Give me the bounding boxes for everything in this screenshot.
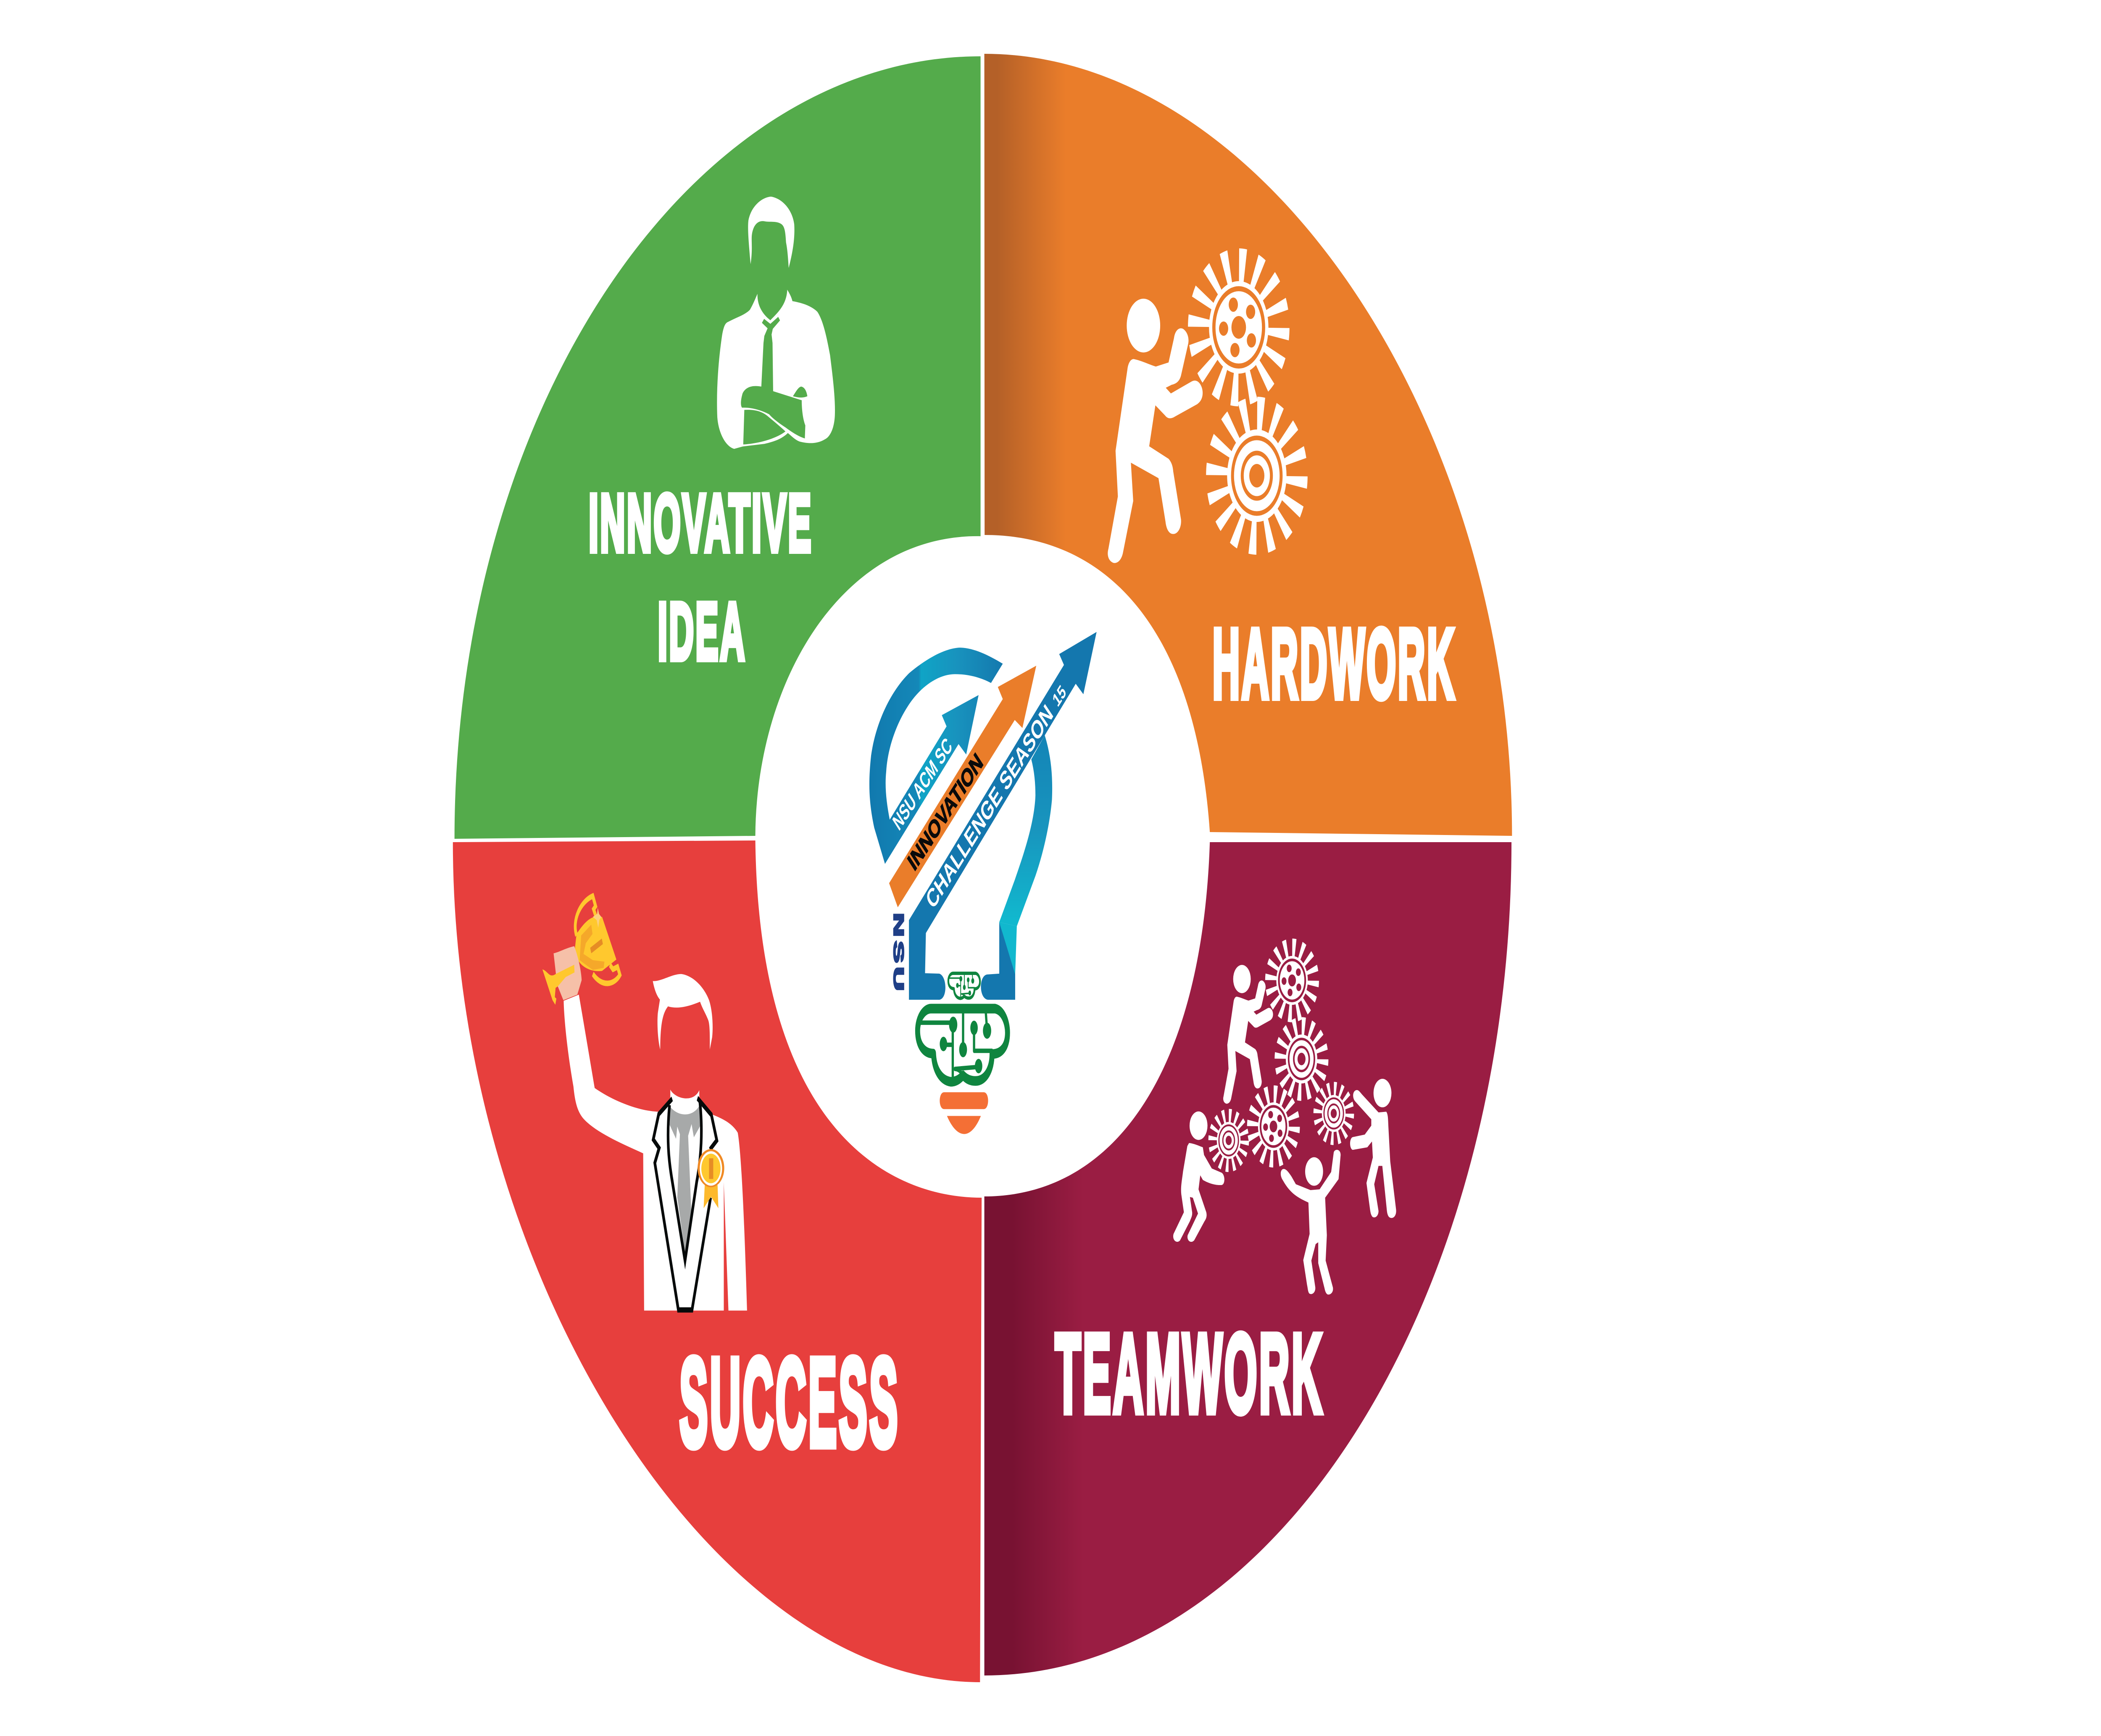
- heading: innovative idea: [589, 478, 813, 677]
- label: vertical nsu: NSU: [891, 913, 907, 995]
- icon: winner in suit raising trophy: [542, 896, 747, 1311]
- panel: teamwork: [985, 842, 1511, 1675]
- heading: innovative idea: IDEA: [658, 586, 746, 677]
- icon: person pushing gears: [1108, 261, 1300, 563]
- icon: team turning gears: [1173, 945, 1396, 1295]
- red quadrant: [453, 840, 982, 1682]
- icon: businessman with crossed arms: [717, 197, 835, 449]
- heading: teamwork: TEAMWORK: [1055, 1312, 1324, 1436]
- logo: light bulb with arrows: [869, 632, 1097, 1134]
- heading: success: SUCCESS: [679, 1333, 900, 1473]
- panel: success: [453, 840, 982, 1682]
- maroon quadrant: [985, 842, 1511, 1675]
- orange quadrant: [985, 54, 1512, 836]
- heading: hardwork: HARDWORK: [1213, 609, 1456, 719]
- heading: innovative idea: INNOVATIVE: [589, 478, 813, 569]
- panel: innovative idea: [455, 56, 981, 839]
- label: innovation: INNOVATION: [904, 748, 986, 876]
- label: nsu acm sc: NSU ACM SC: [889, 732, 955, 835]
- green quadrant shape: [455, 56, 981, 839]
- bulb shapes: [869, 632, 1097, 1134]
- label: season number: 15: [1050, 681, 1069, 711]
- panel: hardwork: [985, 54, 1512, 836]
- label: challenge season: CHALLENGE SEASON: [922, 699, 1057, 914]
